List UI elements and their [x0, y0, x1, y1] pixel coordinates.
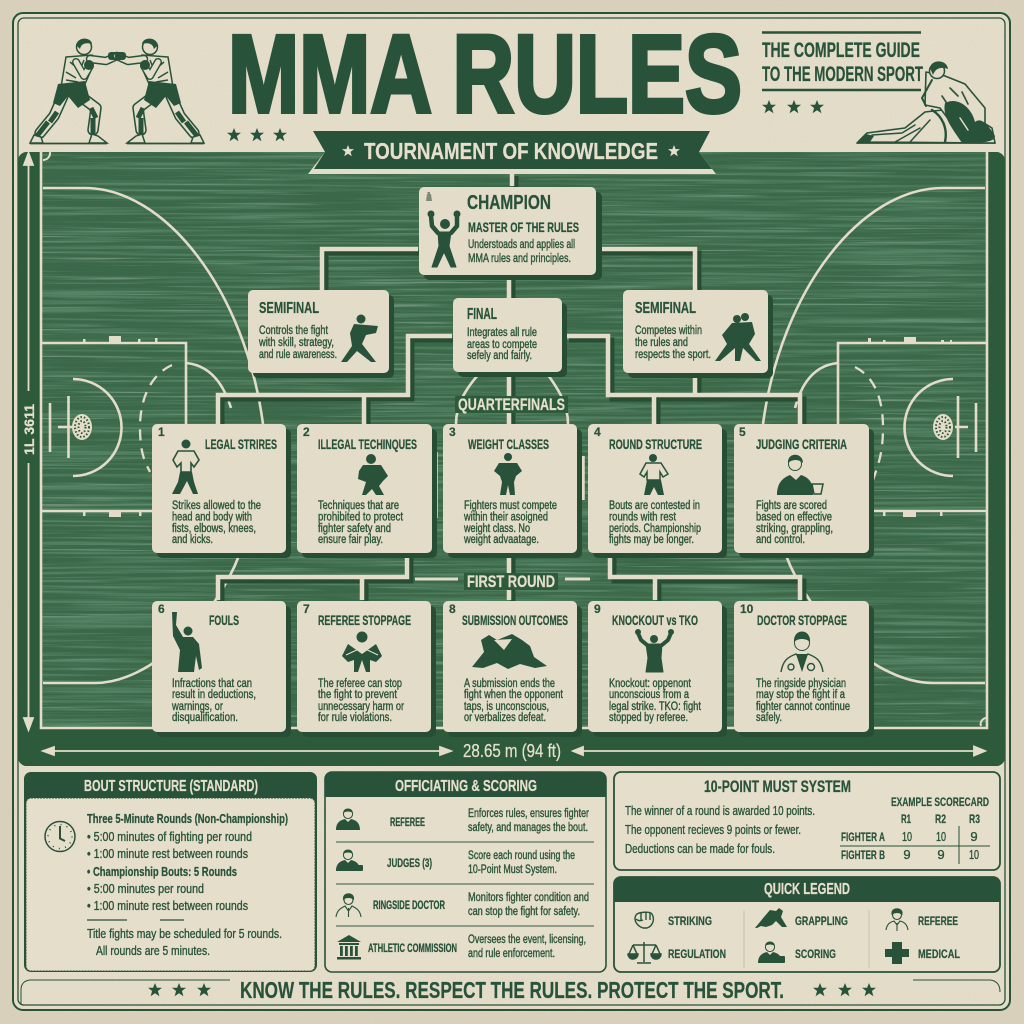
card 8: submission outcomes	[443, 601, 582, 737]
panel: 10-point must system	[614, 772, 1000, 870]
card: champion: Understoads and applies all	[468, 239, 575, 251]
card 1: legal strikes	[152, 424, 291, 558]
panel: officiating and scoring: ATHLETIC COMMISSION	[368, 943, 457, 955]
icon: guard stance fighter	[172, 440, 199, 494]
card 4: round structure: fights may be longer.	[609, 534, 694, 546]
icon: doctor with stethoscope	[781, 632, 823, 672]
field	[18, 152, 1005, 766]
card 6: fouls: FOULS	[209, 613, 239, 628]
card 8: submission outcomes: or verbalizes defeat.	[464, 712, 546, 724]
card: semifinal left: with skill, strategy,	[258, 337, 334, 349]
icon: boxer stance	[341, 314, 378, 362]
card 6: fouls	[152, 601, 291, 737]
panel: bout structure: • 1:00 minute rest between rounds	[87, 898, 248, 913]
panel: bout structure: All rounds are 5 minutes.	[96, 943, 210, 958]
card 10: doctor stoppage: DOCTOR STOPPAGE	[757, 613, 847, 628]
card: semifinal left: Controls the fight	[259, 325, 329, 337]
icon: regulation scales	[628, 942, 661, 963]
card 5: judging criteria: JUDGING CRITERIA	[756, 437, 847, 452]
icon: referee crossed arms	[342, 632, 382, 672]
icon: judge	[336, 850, 363, 871]
card 6: fouls: warnings, or	[171, 701, 223, 713]
round labels: QUARTERFINALS	[458, 396, 565, 414]
icon: grappling	[755, 908, 787, 928]
card 9: knockout vs tko	[588, 601, 727, 737]
card: final: sefely and fairly.	[467, 350, 532, 362]
card 3: weight classes	[443, 424, 582, 558]
example scorecard table: 10	[902, 829, 912, 844]
card 3: weight classes: WEIGHT CLASSES	[468, 437, 549, 452]
card 6: fouls: disqualification.	[172, 712, 238, 724]
icon: winner arms raised	[636, 630, 674, 672]
card: final	[453, 298, 567, 377]
panel: officiating and scoring	[325, 772, 606, 972]
card: final: Integrates all rule	[467, 327, 537, 339]
panel: officiating and scoring: Oversees the event, licensing,	[468, 934, 586, 946]
example scorecard table: 10	[936, 829, 946, 844]
card 8: submission outcomes: A submission ends the	[464, 678, 555, 690]
card 2: illegal techniques: ILLEGAL TECHINQUES	[318, 437, 417, 452]
round labels	[455, 396, 568, 591]
card 2: illegal techniques: ensure fair play.	[318, 534, 383, 546]
card 9: knockout vs tko: 9	[594, 602, 601, 616]
card 3: weight classes: Fighters must compete	[464, 500, 557, 512]
example scorecard table: R3	[969, 812, 980, 826]
example scorecard table: 9	[970, 829, 978, 844]
panel: bout structure: • 5:00 minutes of fighting per round	[87, 829, 252, 844]
icon: right hoop target	[933, 414, 953, 440]
icon: medical cross	[885, 942, 909, 964]
bottom dimension band	[18, 728, 1005, 766]
panel: quick legend: QUICK LEGEND	[764, 881, 850, 898]
example scorecard table: R1	[901, 812, 911, 826]
icon: referee raised arm	[172, 612, 202, 672]
left dimension band	[18, 152, 41, 766]
card 7: referee stoppage: for rule violations.	[318, 712, 392, 724]
panel: 10-point must system: 10-POINT MUST SYSTEM	[704, 777, 851, 796]
banner	[308, 131, 716, 174]
panel: officiating and scoring: Enforces rules, ensures fighter	[468, 808, 589, 820]
card 7: referee stoppage: 7	[303, 602, 310, 616]
icon: athletic commission building	[337, 935, 361, 960]
card 1: legal strikes: head and body with	[172, 512, 252, 524]
card 10: doctor stoppage: may stop the fight if a	[756, 689, 845, 701]
panel: quick legend: GRAPPLING	[795, 914, 848, 928]
card 1: legal strikes: and kicks.	[172, 534, 213, 546]
card: champion: MMA rules and principles.	[468, 253, 571, 265]
icon: scoring judge	[758, 942, 785, 963]
subtitle block: TO THE MODERN SPORT	[762, 63, 923, 86]
card 4: round structure: Bouts are contested in	[609, 500, 700, 512]
card 4: round structure: 4	[594, 425, 601, 439]
card: semifinal right: SEMIFINAL	[635, 300, 696, 317]
card 3: weight classes: weight class. No	[463, 523, 530, 535]
icon: ringside doctor	[336, 894, 361, 917]
panel: officiating and scoring: OFFICIATING & SCORING	[395, 778, 537, 795]
panel: bout structure: • Championship Bouts: 5 Rounds	[87, 865, 237, 879]
card 9: knockout vs tko: unconscious from a	[609, 689, 689, 701]
card 9: knockout vs tko: KNOCKOUT vs TKO	[612, 613, 698, 628]
card 2: illegal techniques: Techniques that are	[318, 500, 399, 512]
panel: bout structure: BOUT STRUCTURE (STANDARD)	[84, 778, 258, 795]
panel: bout structure	[24, 772, 317, 972]
card 10: doctor stoppage: 10	[740, 602, 754, 616]
card 2: illegal techniques: prohibited to protect	[318, 512, 404, 524]
panel: bout structure: Three 5-Minute Rounds (Non-Championship)	[87, 812, 288, 826]
example scorecard table	[840, 795, 990, 864]
card 5: judging criteria: and control.	[756, 534, 805, 546]
panel: bout structure: • 1:00 minute rest between rounds	[87, 846, 248, 861]
card 5: judging criteria: Fights are scored	[756, 500, 827, 512]
panel: 10-point must system: The winner of a round is awarded 10 points.	[625, 803, 815, 818]
card: semifinal right	[623, 290, 773, 378]
court markings	[41, 152, 987, 728]
example scorecard table: FIGHTER A	[841, 830, 885, 844]
panel: officiating and scoring: REFEREE	[390, 817, 425, 829]
example scorecard table: 9	[937, 847, 945, 862]
card 2: illegal techniques	[297, 424, 437, 558]
panel: quick legend: REFEREE	[918, 914, 958, 928]
icon: dark fighter guard	[358, 454, 388, 495]
panel: officiating and scoring: 10-Point Must System.	[468, 864, 557, 876]
card 5: judging criteria: 5	[739, 425, 746, 439]
card 3: weight classes: weight advaatage.	[463, 534, 539, 546]
card 7: referee stoppage: unnecessary harm or	[318, 701, 404, 713]
card 7: referee stoppage: REFEREE STOPPAGE	[318, 613, 411, 628]
icon: champion arms raised	[428, 211, 460, 267]
stars left of banner	[227, 128, 287, 141]
card: semifinal left: SEMIFINAL	[259, 300, 319, 317]
card: final: FINAL	[467, 306, 497, 323]
card 10: doctor stoppage: fighter cannot continue	[756, 701, 850, 713]
card 7: referee stoppage	[297, 601, 436, 737]
icon: grappling pile	[472, 634, 547, 669]
card 5: judging criteria: based on effective	[756, 512, 832, 524]
card 4: round structure: rounds with rest	[609, 512, 677, 524]
card 9: knockout vs tko: Knockout: oppenont	[609, 678, 692, 690]
card: final: areas to compete	[467, 339, 537, 351]
horizontal dimension arrow	[43, 746, 985, 756]
footer tagline bar: KNOW THE RULES. RESPECT THE RULES. PROTECT THE SPORT.	[240, 977, 784, 1003]
icon: referee outline	[886, 909, 908, 931]
panel: 10-point must system: The opponent recieves 9 points or fewer.	[625, 822, 801, 837]
example scorecard table: R2	[935, 812, 946, 826]
card: champion: MASTER OF THE RULES	[468, 220, 579, 235]
card 10: doctor stoppage	[734, 601, 874, 737]
example scorecard table: 9	[903, 847, 911, 862]
card 4: round structure	[588, 424, 727, 558]
card 9: knockout vs tko: stopped by referee.	[609, 712, 688, 724]
panel: quick legend: MEDICAL	[918, 947, 960, 961]
panel: bout structure: • 5:00 minutes per round	[87, 881, 204, 896]
card: semifinal right: respects the sport.	[635, 349, 711, 361]
card 9: knockout vs tko: legal strike. TKO: fight	[609, 701, 702, 713]
card 3: weight classes: 3	[449, 425, 456, 439]
icon: champion small mark	[426, 192, 432, 201]
card 6: fouls: result in deductions,	[172, 689, 256, 701]
card 10: doctor stoppage: safely.	[756, 712, 782, 724]
card 7: referee stoppage: The referee can stop	[318, 678, 402, 690]
card 4: round structure: periods. Championship	[609, 523, 701, 535]
card 10: doctor stoppage: The ringside physician	[756, 678, 846, 690]
icon: shirtless fighter	[640, 454, 668, 495]
card 1: legal strikes: fists, elbows, knees,	[172, 523, 256, 535]
card 8: submission outcomes: SUBMISSION OUTCOMES	[462, 613, 568, 628]
icon: striking fist	[635, 912, 653, 928]
card: champion: CHAMPION	[467, 192, 551, 214]
icon: fighter hands on hips	[494, 453, 522, 495]
panel: 10-point must system: Deductions can be made for fouls.	[625, 841, 775, 856]
illustration: boxers exchanging punches	[30, 39, 204, 144]
card 2: illegal techniques: fighter safety and	[318, 523, 391, 535]
card 2: illegal techniques: 2	[303, 425, 310, 439]
vertical dimension label: 1L 3611	[21, 404, 37, 455]
card 1: legal strikes: LEGAL STRIRES	[205, 437, 277, 452]
panel: officiating and scoring: can stop the fight for safety.	[468, 906, 580, 918]
card 3: weight classes: within their asoigned	[463, 512, 548, 524]
panel: officiating and scoring: JUDGES (3)	[387, 858, 432, 870]
panel: officiating and scoring: Score each round using the	[468, 850, 575, 862]
example scorecard table: 10	[969, 847, 979, 862]
example scorecard table: FIGHTER B	[841, 848, 885, 862]
vertical dimension arrow	[24, 153, 33, 730]
subtitle block: THE COMPLETE GUIDE	[762, 39, 920, 62]
icon: clock	[45, 822, 75, 852]
banner: TOURNAMENT OF KNOWLEDGE	[364, 138, 658, 164]
card 1: legal strikes: 1	[158, 425, 165, 439]
card 6: fouls: Infractions that can	[172, 678, 252, 690]
card: semifinal right: Competes within	[635, 325, 702, 337]
card 1: legal strikes: Strikes allowed to the	[172, 500, 261, 512]
card 7: referee stoppage: the fight to prevent	[318, 689, 398, 701]
card: champion	[419, 187, 602, 280]
horizontal dimension label: 28.65 m (94 ft)	[463, 741, 561, 761]
panel: quick legend: SCORING	[795, 947, 836, 961]
panel: officiating and scoring: RINGSIDE DOCTOR	[373, 900, 445, 912]
panel: officiating and scoring: Monitors fighter condition and	[468, 892, 589, 904]
panel: bout structure: Title fights may be scheduled for 5 rounds.	[87, 926, 282, 941]
card 8: submission outcomes: 8	[449, 602, 456, 616]
card 4: round structure: ROUND STRUCTURE	[609, 437, 702, 452]
title: MMA RULES	[228, 13, 742, 136]
card 8: submission outcomes: taps, is unconscious,	[464, 701, 549, 713]
panel: quick legend	[614, 877, 1000, 972]
card: semifinal left: and rule awareness.	[259, 349, 337, 361]
panel: officiating and scoring: safety, and manages the bout.	[468, 822, 588, 834]
panel: quick legend: REGULATION	[668, 947, 726, 961]
card 5: judging criteria	[734, 424, 874, 558]
subtitle block	[762, 32, 923, 113]
icon: referee	[336, 808, 360, 830]
card 8: submission outcomes: fight when the opponent	[464, 689, 564, 701]
bracket connectors	[218, 172, 804, 604]
right dimension band	[987, 152, 1005, 766]
icon: judge with scorecard	[777, 455, 823, 495]
illustration: wrestlers on the ground	[857, 61, 995, 143]
panel: officiating and scoring: and rule enforcement.	[468, 948, 555, 960]
icon: clinching fighters	[715, 313, 761, 361]
card 6: fouls: 6	[158, 602, 165, 616]
icon: left hoop target	[72, 414, 92, 440]
card: semifinal right: the rules and	[635, 337, 688, 349]
round labels: FIRST ROUND	[467, 572, 555, 591]
panel: quick legend: STRIKING	[668, 914, 712, 928]
card 5: judging criteria: striking, grappling,	[756, 523, 833, 535]
card: semifinal left	[248, 290, 394, 378]
